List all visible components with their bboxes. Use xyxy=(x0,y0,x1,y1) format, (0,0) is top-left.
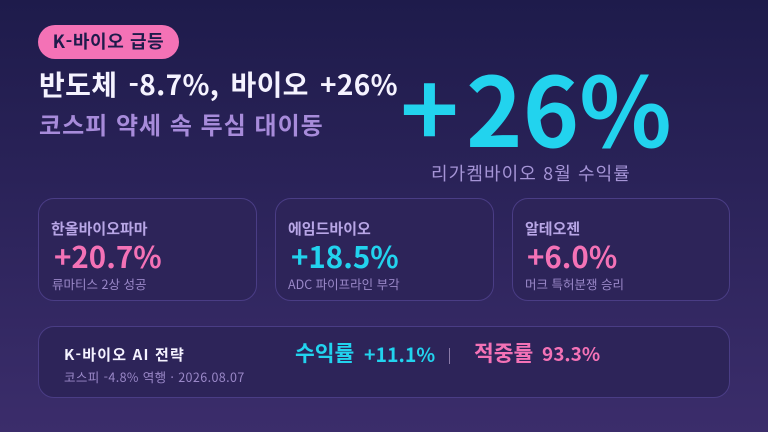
card note: 머크 특허분쟁 승리 xyxy=(525,274,624,293)
separator xyxy=(449,348,450,364)
strategy note: 코스피 -4.8% 역행 · 2026.08.07 xyxy=(64,367,245,386)
big number caption: 리가켐바이오 8월 수익률 xyxy=(431,160,631,186)
hit-rate metric: 적중률 xyxy=(474,337,533,368)
card name: 에임드바이오 xyxy=(288,218,371,239)
subheadline: 코스피 약세 속 투심 대이동 xyxy=(39,106,324,141)
big number: 26% xyxy=(466,36,672,175)
hit-rate metric xyxy=(474,337,600,368)
card: 에임드바이오 xyxy=(275,198,494,301)
card name: 알테오젠 xyxy=(525,218,580,239)
card value: +6.0% xyxy=(527,235,617,277)
card: 알테오젠 xyxy=(512,198,730,301)
badge: K-바이오 급등: K-바이오 급등 xyxy=(53,28,164,54)
strategy title: K-바이오 AI 전략 xyxy=(64,344,185,365)
return metric: 수익률 xyxy=(295,337,354,368)
card note: 류마티스 2상 성공 xyxy=(52,274,146,293)
return metric xyxy=(295,337,435,368)
badge: K-바이오 급등 xyxy=(38,25,179,59)
return metric: +11.1% xyxy=(364,339,435,368)
card value: +18.5% xyxy=(291,235,399,277)
card name: 한올바이오파마 xyxy=(51,218,148,239)
panel: AI strategy xyxy=(38,326,730,398)
card: 한올바이오파마 xyxy=(38,198,257,301)
hit-rate metric: 93.3% xyxy=(542,340,600,367)
headline: 반도체 -8.7%, 바이오 +26% xyxy=(39,64,398,104)
card value: +20.7% xyxy=(54,235,162,277)
card note: ADC 파이프라인 부각 xyxy=(288,274,400,293)
big number: + xyxy=(400,31,459,176)
